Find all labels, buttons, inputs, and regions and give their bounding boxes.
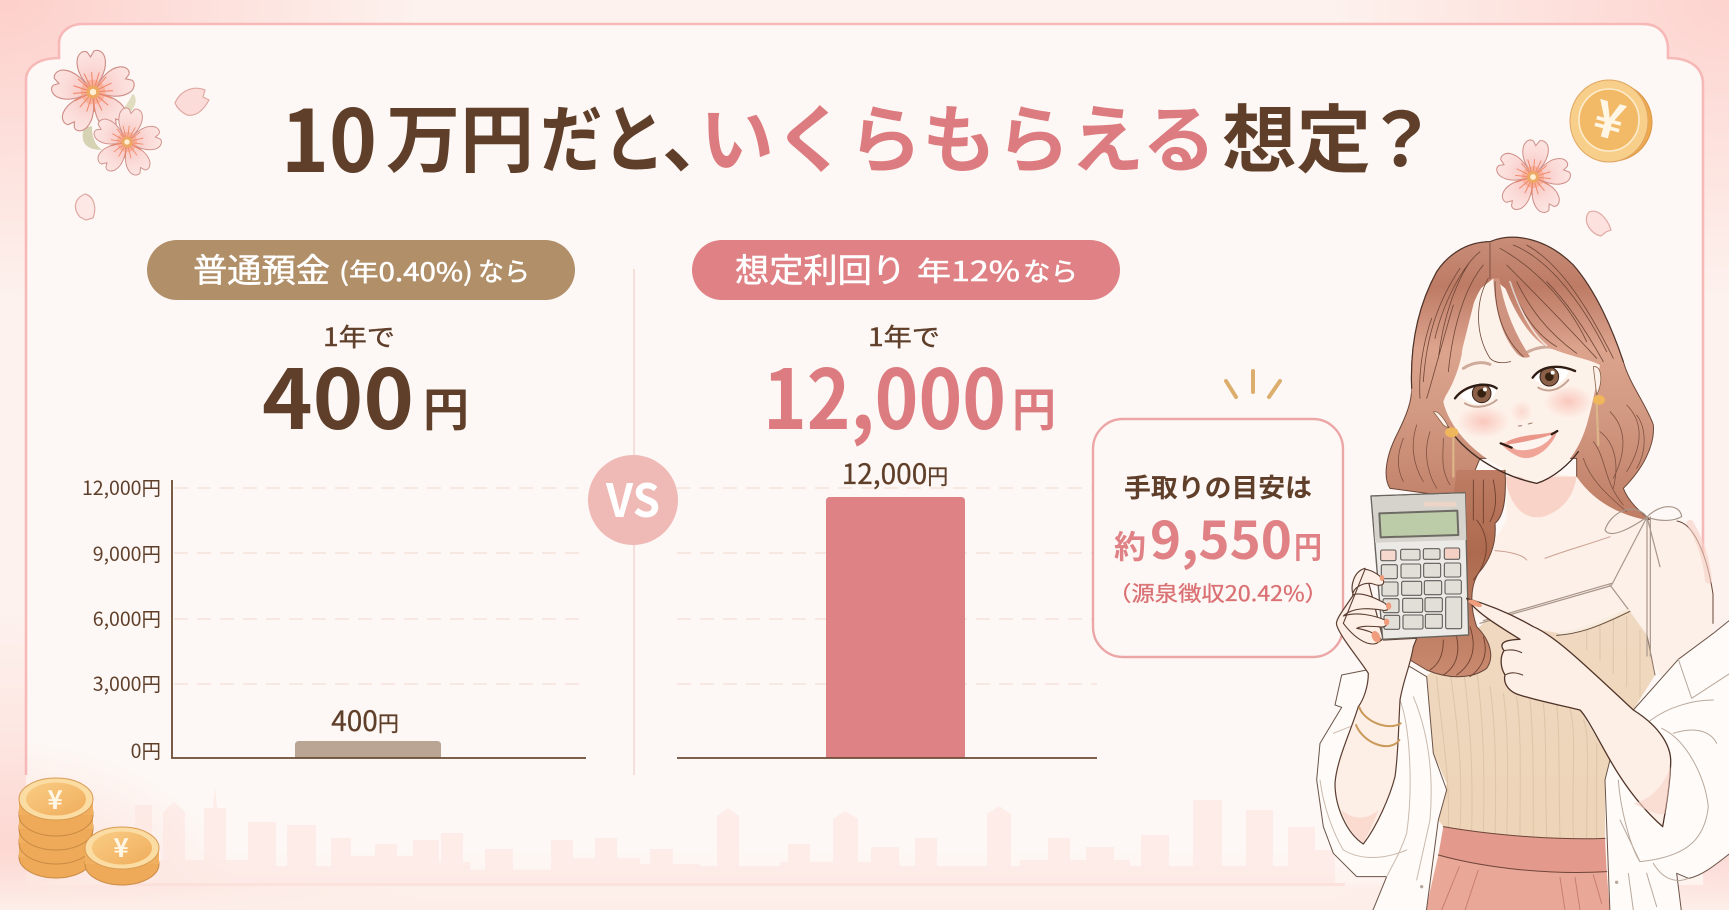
neck shadow	[1505, 477, 1577, 517]
axis labels: 9,000円	[93, 538, 161, 567]
skirt	[1425, 827, 1610, 910]
bar: 12,000 yen	[826, 497, 965, 758]
panel: expected yield pill	[692, 240, 1120, 300]
axis labels: 3,000円	[93, 668, 161, 697]
lower hair strands	[1430, 480, 1496, 677]
back hair strands	[1398, 405, 1644, 512]
back hair	[1386, 237, 1653, 520]
axis labels: 0円	[131, 735, 161, 764]
hair strands	[1420, 243, 1613, 398]
panel: expected yield pill: 想定利回り	[735, 244, 906, 292]
left arm and hand	[1335, 568, 1417, 844]
front hair left	[1411, 242, 1490, 412]
panel: savings pill: なら	[478, 252, 530, 289]
panel: savings pill: (年0.40%)	[339, 253, 473, 289]
callout: take-home estimate	[1093, 419, 1343, 657]
title: 想定	[1222, 81, 1371, 188]
icon: yen coin top right: ¥	[1586, 79, 1633, 156]
lower hair behind calculator	[1410, 470, 1505, 677]
left hand fingers	[1343, 569, 1391, 644]
yield result: 1年で	[868, 318, 940, 354]
callout: take-home estimate: 約	[1114, 522, 1146, 568]
cherry blossoms: top left	[47, 48, 209, 220]
panel: expected yield pill: 年12%	[917, 250, 1020, 289]
bar chart: yield	[677, 453, 1097, 758]
calculator	[1371, 493, 1469, 639]
hair outline	[1411, 237, 1623, 388]
title: 、	[662, 81, 736, 188]
eyes	[1455, 347, 1575, 407]
callout: take-home estimate: 9,550	[1150, 499, 1292, 574]
city skyline	[135, 787, 1345, 886]
illustration: woman holding calculator	[1317, 237, 1729, 910]
pointing forearm and hand	[1467, 598, 1671, 827]
axis labels: 6,000円	[93, 603, 161, 632]
right shirt panel	[1605, 620, 1729, 910]
cherry blossoms: top right	[1491, 137, 1611, 236]
straps and bow	[1480, 507, 1682, 656]
title: 万円	[386, 81, 534, 188]
collarbone and shoulder lines	[1495, 521, 1713, 623]
savings result: 円	[423, 374, 469, 440]
panel: savings pill	[147, 240, 575, 300]
callout: take-home estimate: 手取りの目安は	[1124, 468, 1312, 505]
yield result: 12,000	[763, 334, 1006, 453]
lower hair outline	[1410, 470, 1505, 677]
chest and shoulder skin	[1470, 467, 1713, 680]
yield result: 円	[1012, 374, 1056, 440]
icon: stacked yen coins	[19, 778, 159, 885]
ribbed tank top	[1426, 609, 1655, 839]
callout: take-home estimate: 円	[1294, 523, 1322, 567]
savings result: 400	[262, 334, 414, 453]
bar: 400 yen	[295, 741, 441, 758]
mouth	[1501, 431, 1557, 458]
panel: expected yield pill: なら	[1023, 252, 1078, 289]
savings result	[262, 318, 469, 453]
savings result: 1年で	[323, 318, 395, 354]
face	[1411, 237, 1623, 483]
title: ？	[1364, 81, 1438, 188]
sparkle rays	[1226, 371, 1280, 397]
axis labels	[82, 472, 161, 764]
fringe wisps	[1493, 278, 1530, 358]
front hair right	[1490, 237, 1623, 375]
blush	[1457, 405, 1510, 438]
bracelets	[1356, 707, 1401, 746]
earrings	[1433, 367, 1605, 477]
vs divider: VS	[605, 465, 660, 531]
panel: savings pill: 普通預金	[193, 244, 330, 292]
title: 10	[281, 72, 377, 197]
left shirt panel	[1317, 667, 1447, 910]
icon: stacked yen coins: ¥	[47, 780, 63, 817]
title: いくらもらえる	[700, 81, 1216, 188]
axis labels: 12,000円	[82, 472, 161, 501]
title	[281, 72, 1438, 197]
bar label: 400円	[331, 700, 399, 740]
callout: take-home estimate: （源泉徴収20.42%）	[1108, 578, 1328, 608]
nose	[1518, 423, 1532, 426]
title: だと	[540, 81, 665, 188]
bar label: 12,000円	[842, 453, 948, 493]
icon: stacked yen coins: ¥	[113, 828, 129, 865]
vs divider	[588, 269, 678, 775]
bar chart: savings	[82, 472, 588, 764]
icon: yen coin top right	[1570, 79, 1652, 162]
